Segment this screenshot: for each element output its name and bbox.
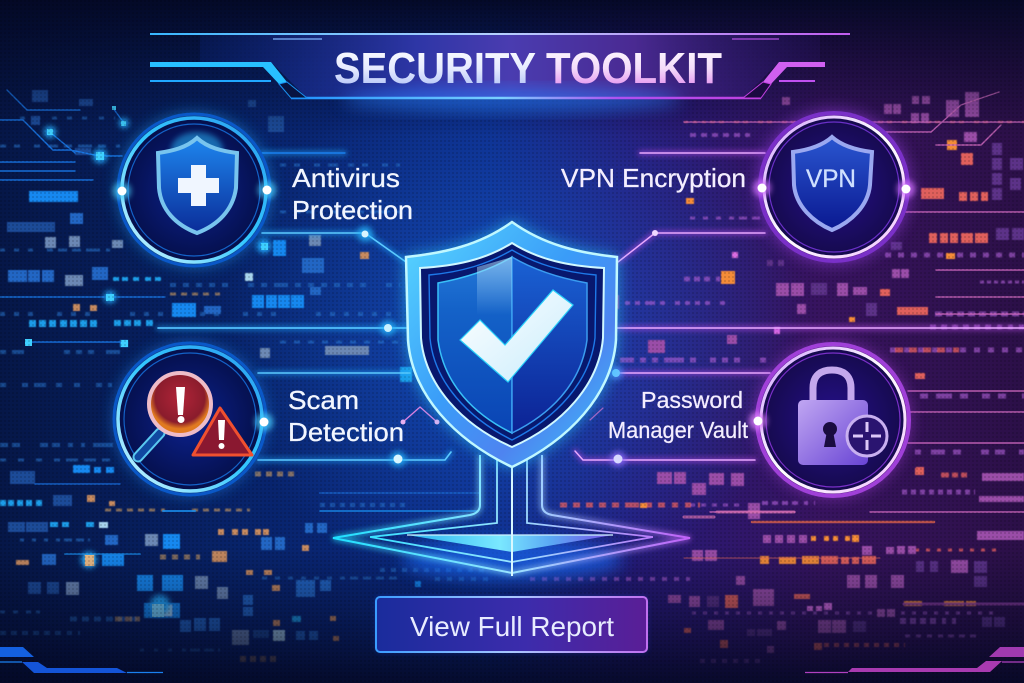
- icon: warning triangle: [193, 408, 252, 455]
- background traces: [0, 90, 1024, 604]
- background data blocks: purple side: [605, 92, 1024, 653]
- bottom-left accent: [0, 647, 163, 673]
- label: VPN encryption: VPN Encryption: [561, 163, 746, 193]
- button: view full report: View Full Report: [410, 611, 614, 642]
- pedestal platform: [333, 455, 690, 580]
- button: view full report: [376, 597, 647, 652]
- label: scam detection: [288, 385, 404, 447]
- background node sparks: [25, 106, 271, 617]
- background small data rows: [0, 118, 1024, 661]
- label: password manager vault: Manager Vault: [608, 417, 749, 443]
- icon panel: password manager vault: [749, 344, 909, 496]
- heading: SECURITY: [334, 44, 536, 93]
- heading: [334, 44, 722, 93]
- central shield: [406, 222, 617, 467]
- heading: TOOLKIT: [546, 44, 722, 93]
- bottom-right accent: [805, 647, 1024, 672]
- right connectors: [575, 153, 1024, 467]
- icon panel: antivirus protection: [113, 114, 276, 266]
- icon: VPN shield: VPN: [806, 165, 856, 193]
- label: antivirus protection: Antivirus: [292, 163, 400, 193]
- icon: VPN shield: [793, 137, 872, 230]
- connector lines: [158, 153, 1024, 467]
- label: scam detection: Detection: [288, 417, 404, 447]
- icon: padlock with dial: [798, 370, 887, 465]
- label: antivirus protection: [292, 163, 413, 225]
- title banner: [150, 33, 850, 112]
- label: scam detection: Scam: [288, 385, 359, 415]
- icon: magnifying glass with alert: [138, 373, 211, 457]
- label: password manager vault: [608, 387, 749, 443]
- label: antivirus protection: Protection: [292, 195, 413, 225]
- icon: check mark: [460, 290, 573, 382]
- background data blocks: blue side: [0, 90, 421, 645]
- label: password manager vault: Password: [641, 387, 743, 413]
- icon panel: scam detection: [114, 343, 273, 495]
- inner shield right half: [512, 257, 587, 433]
- left connectors: [158, 153, 451, 467]
- icon panel: VPN encryption: [753, 111, 915, 263]
- inner shield left half: [438, 257, 512, 433]
- corner accents: [0, 647, 1024, 673]
- icon: shield with cross: [158, 132, 237, 233]
